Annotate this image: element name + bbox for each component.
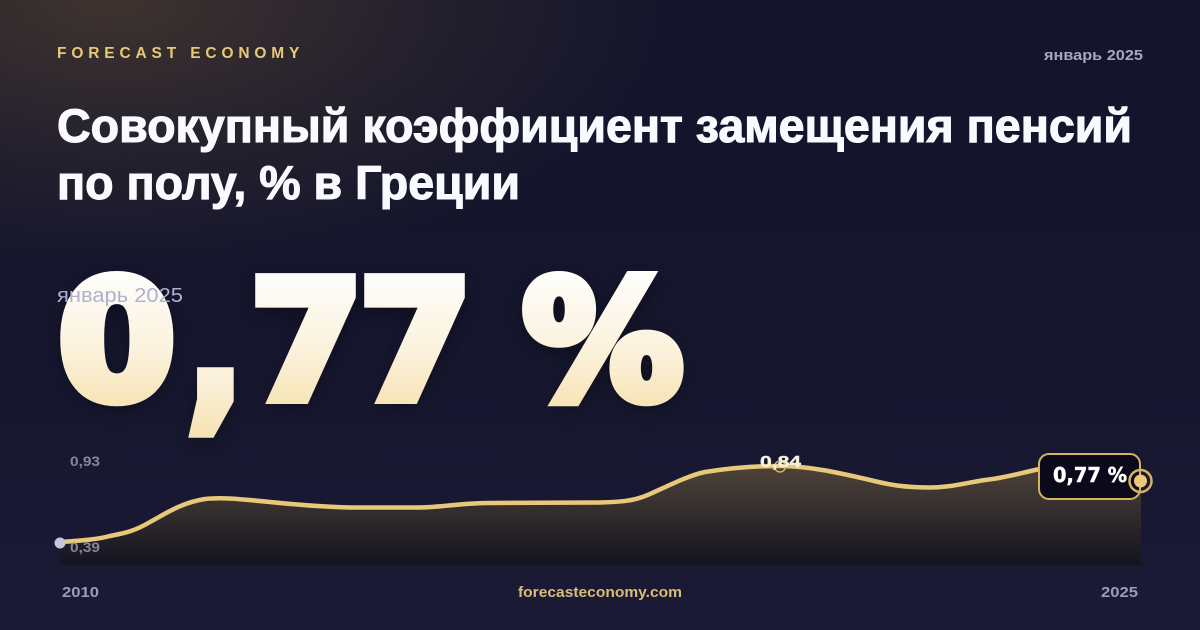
chart area fill <box>60 466 1141 565</box>
title <box>57 99 1132 209</box>
big value: , <box>188 245 243 449</box>
big value: 7 <box>359 247 472 437</box>
chart line <box>60 466 1040 542</box>
title: по полу, % в Греции <box>57 156 520 209</box>
title: Совокупный коэффициент замещения пенсий <box>57 99 1132 152</box>
start point <box>54 538 66 548</box>
peak label: 0,84 <box>760 454 801 471</box>
latest value callout: 0,77 % <box>1053 463 1127 487</box>
big value: 0 <box>58 247 175 437</box>
date top right: январь 2025 <box>1044 47 1143 64</box>
latest point marker <box>1130 470 1152 492</box>
axis value 0,93: 0,93 <box>70 453 100 469</box>
axis value 0,39: 0,39 <box>70 539 100 555</box>
peak marker <box>774 461 786 472</box>
date under value: январь 2025 <box>57 285 183 307</box>
start year: 2010 <box>62 585 99 601</box>
end year: 2025 <box>1101 585 1138 601</box>
latest value callout <box>1039 454 1140 499</box>
big value: 7 <box>250 247 363 437</box>
big value: % <box>523 248 683 437</box>
line chart <box>54 453 1152 565</box>
big value <box>58 245 683 449</box>
brand label: FORECAST ECONOMY <box>57 45 304 62</box>
website: forecasteconomy.com <box>518 585 682 601</box>
